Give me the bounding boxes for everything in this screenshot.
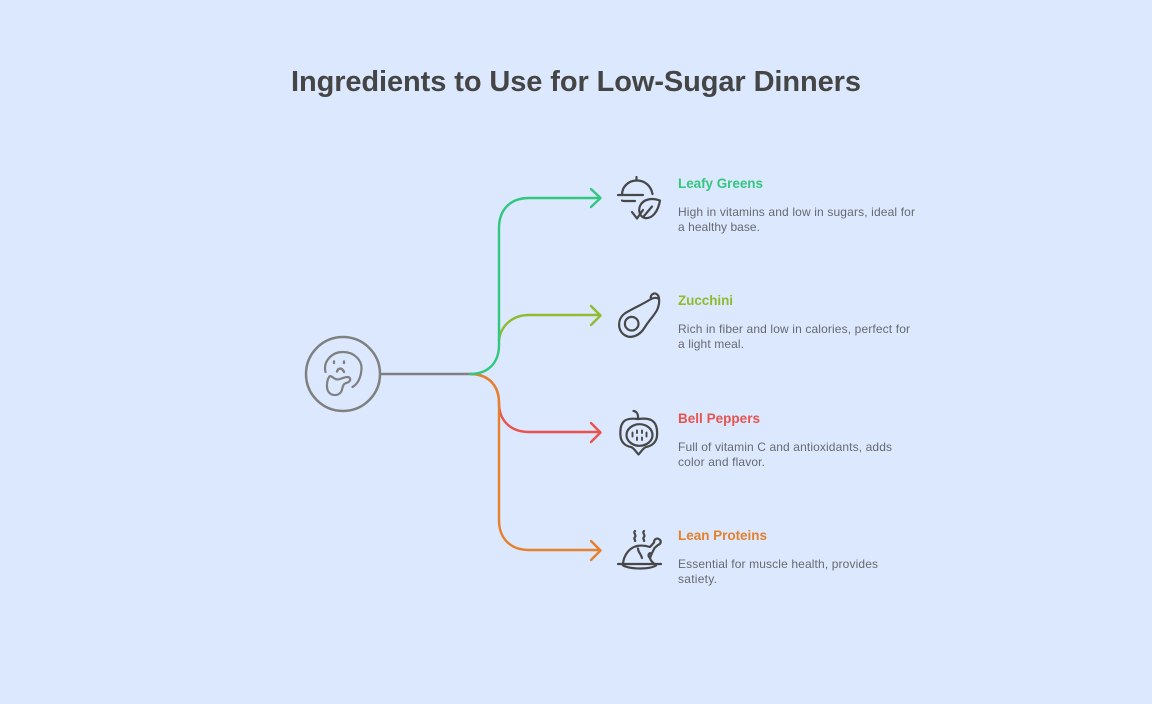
description <box>678 322 910 351</box>
arrow: lean proteins <box>470 374 600 560</box>
description: Essential for muscle health, provides <box>678 557 878 571</box>
description: High in vitamins and low in sugars, ideal for <box>678 205 915 219</box>
icon: roast chicken <box>618 531 661 568</box>
description: a healthy base. <box>678 220 760 234</box>
description <box>678 205 915 234</box>
icon: thinking face hub <box>306 337 380 411</box>
heading: Bell Peppers <box>678 411 760 426</box>
description <box>678 557 878 586</box>
icon: bell pepper <box>620 411 657 454</box>
heading: Zucchini <box>678 293 733 308</box>
item: bell peppers <box>620 411 892 469</box>
arrow: bell peppers <box>470 374 600 442</box>
connector: hub trunk <box>381 373 470 375</box>
description: color and flavor. <box>678 455 765 469</box>
heading: Lean Proteins <box>678 528 767 543</box>
description: Full of vitamin C and antioxidants, adds <box>678 440 892 454</box>
description: a light meal. <box>678 337 744 351</box>
title: Ingredients to Use for Low-Sugar Dinners <box>291 66 861 98</box>
icon: zucchini <box>619 293 659 337</box>
description: satiety. <box>678 572 717 586</box>
item: leafy greens <box>618 176 915 234</box>
item: zucchini <box>619 293 910 351</box>
icon: cloche and leaf <box>618 177 660 218</box>
item: lean proteins <box>618 528 878 586</box>
description <box>678 440 892 469</box>
heading: Leafy Greens <box>678 176 763 191</box>
arrow: zucchini <box>499 306 600 340</box>
arrow: leafy greens <box>470 189 600 374</box>
description: Rich in fiber and low in calories, perfect for <box>678 322 910 336</box>
